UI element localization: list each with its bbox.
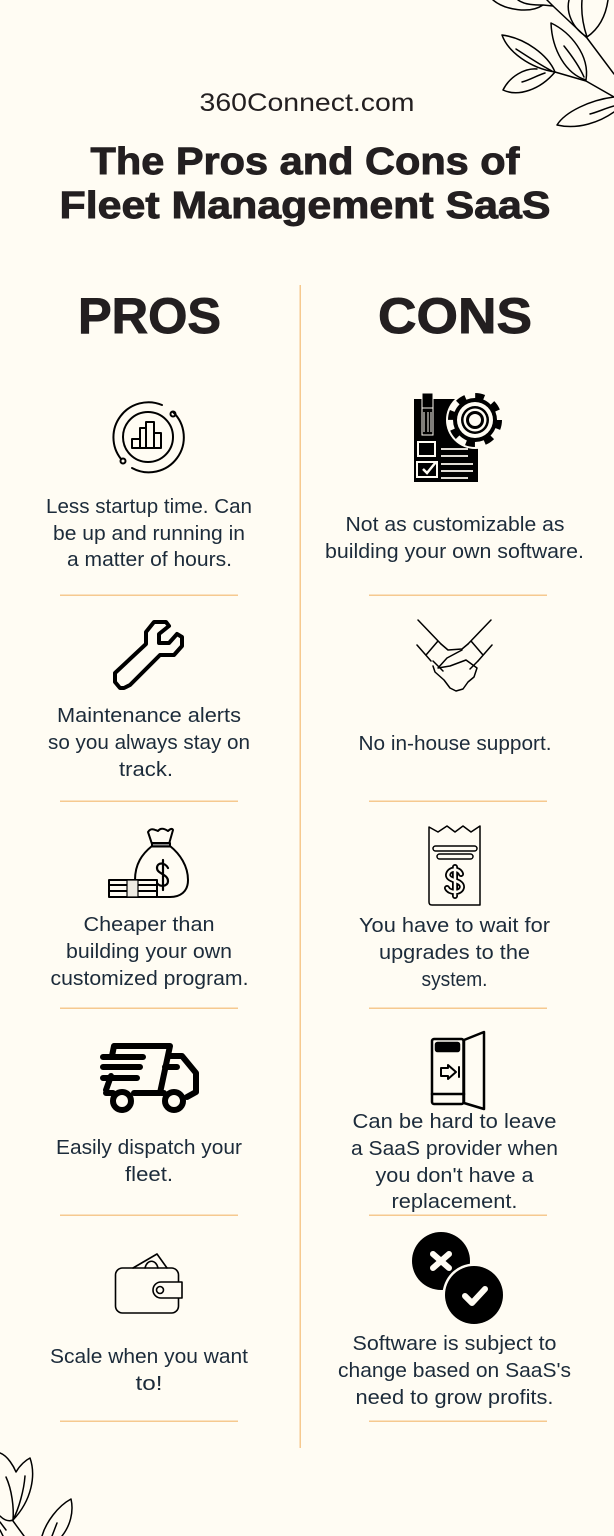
icon: handshake — [417, 620, 492, 691]
text: cheaper: Cheaper than — [84, 913, 214, 936]
text: wait for upgrades: system. — [422, 968, 488, 991]
brand name: 360Connect.com — [200, 89, 414, 117]
text: hard to leave: a SaaS provider when — [351, 1137, 558, 1160]
title — [60, 141, 550, 227]
icon: wallet — [116, 1254, 182, 1313]
text: subject to change: change based on SaaS's — [338, 1359, 571, 1382]
text: dispatch — [56, 1136, 242, 1186]
icon: receipt — [429, 826, 480, 905]
text: maintenance alerts: Maintenance alerts — [57, 704, 241, 727]
text: not as customizable: Not as customizable as — [346, 513, 564, 536]
text: not as customizable — [325, 513, 584, 563]
text: not as customizable: building your own software. — [325, 540, 584, 563]
decoration: bottom-left leaves — [0, 1453, 72, 1536]
text: hard to leave: you don't have a — [376, 1164, 534, 1187]
text: hard to leave — [351, 1110, 558, 1213]
text: wait for upgrades: upgrades to the — [379, 941, 530, 964]
text: less startup time: be up and running in — [53, 522, 245, 545]
text: maintenance alerts: track. — [119, 758, 173, 781]
text: cheaper: customized program. — [50, 967, 248, 990]
text: dispatch: fleet. — [125, 1163, 173, 1186]
text: no in-house support: No in-house support. — [358, 732, 552, 755]
heading: cons: CONS — [378, 288, 532, 344]
icon: chart in circles — [113, 402, 184, 472]
icon: money bag and cash — [109, 829, 188, 897]
text: scale — [50, 1345, 248, 1395]
panel: pros column — [46, 402, 252, 1422]
text: hard to leave: Can be hard to leave — [352, 1110, 556, 1133]
icon: delivery truck — [103, 1046, 196, 1110]
decoration: top-right leaves — [493, 0, 614, 127]
text: cheaper: building your own — [66, 940, 232, 963]
text: dispatch: Easily dispatch your — [56, 1136, 242, 1159]
text: wait for upgrades: You have to wait for — [359, 914, 550, 937]
icon: checklist and gear — [414, 391, 504, 482]
text: less startup time: Less startup time. Can — [46, 495, 252, 518]
text: maintenance alerts — [48, 704, 250, 781]
text: less startup time: a matter of hours. — [67, 548, 232, 571]
text: subject to change — [338, 1332, 571, 1409]
text: scale: to! — [136, 1372, 162, 1395]
text: hard to leave: replacement. — [392, 1190, 518, 1213]
icon: wrench — [115, 622, 182, 688]
heading: pros: PROS — [78, 288, 221, 344]
text: subject to change: Software is subject to — [352, 1332, 556, 1355]
title: Fleet Management SaaS — [60, 185, 550, 227]
column divider — [300, 285, 301, 1448]
text: cheaper — [50, 913, 248, 990]
icon: cross and check badges — [412, 1232, 506, 1326]
text: maintenance alerts: so you always stay on — [48, 731, 250, 754]
icon: open door exit — [432, 1032, 484, 1109]
text: wait for upgrades — [359, 914, 550, 991]
text: subject to change: need to grow profits. — [356, 1386, 554, 1409]
panel: cons column — [325, 391, 584, 1422]
text: less startup time — [46, 495, 252, 571]
text: scale: Scale when you want — [50, 1345, 248, 1368]
title: The Pros and Cons of — [90, 141, 520, 183]
